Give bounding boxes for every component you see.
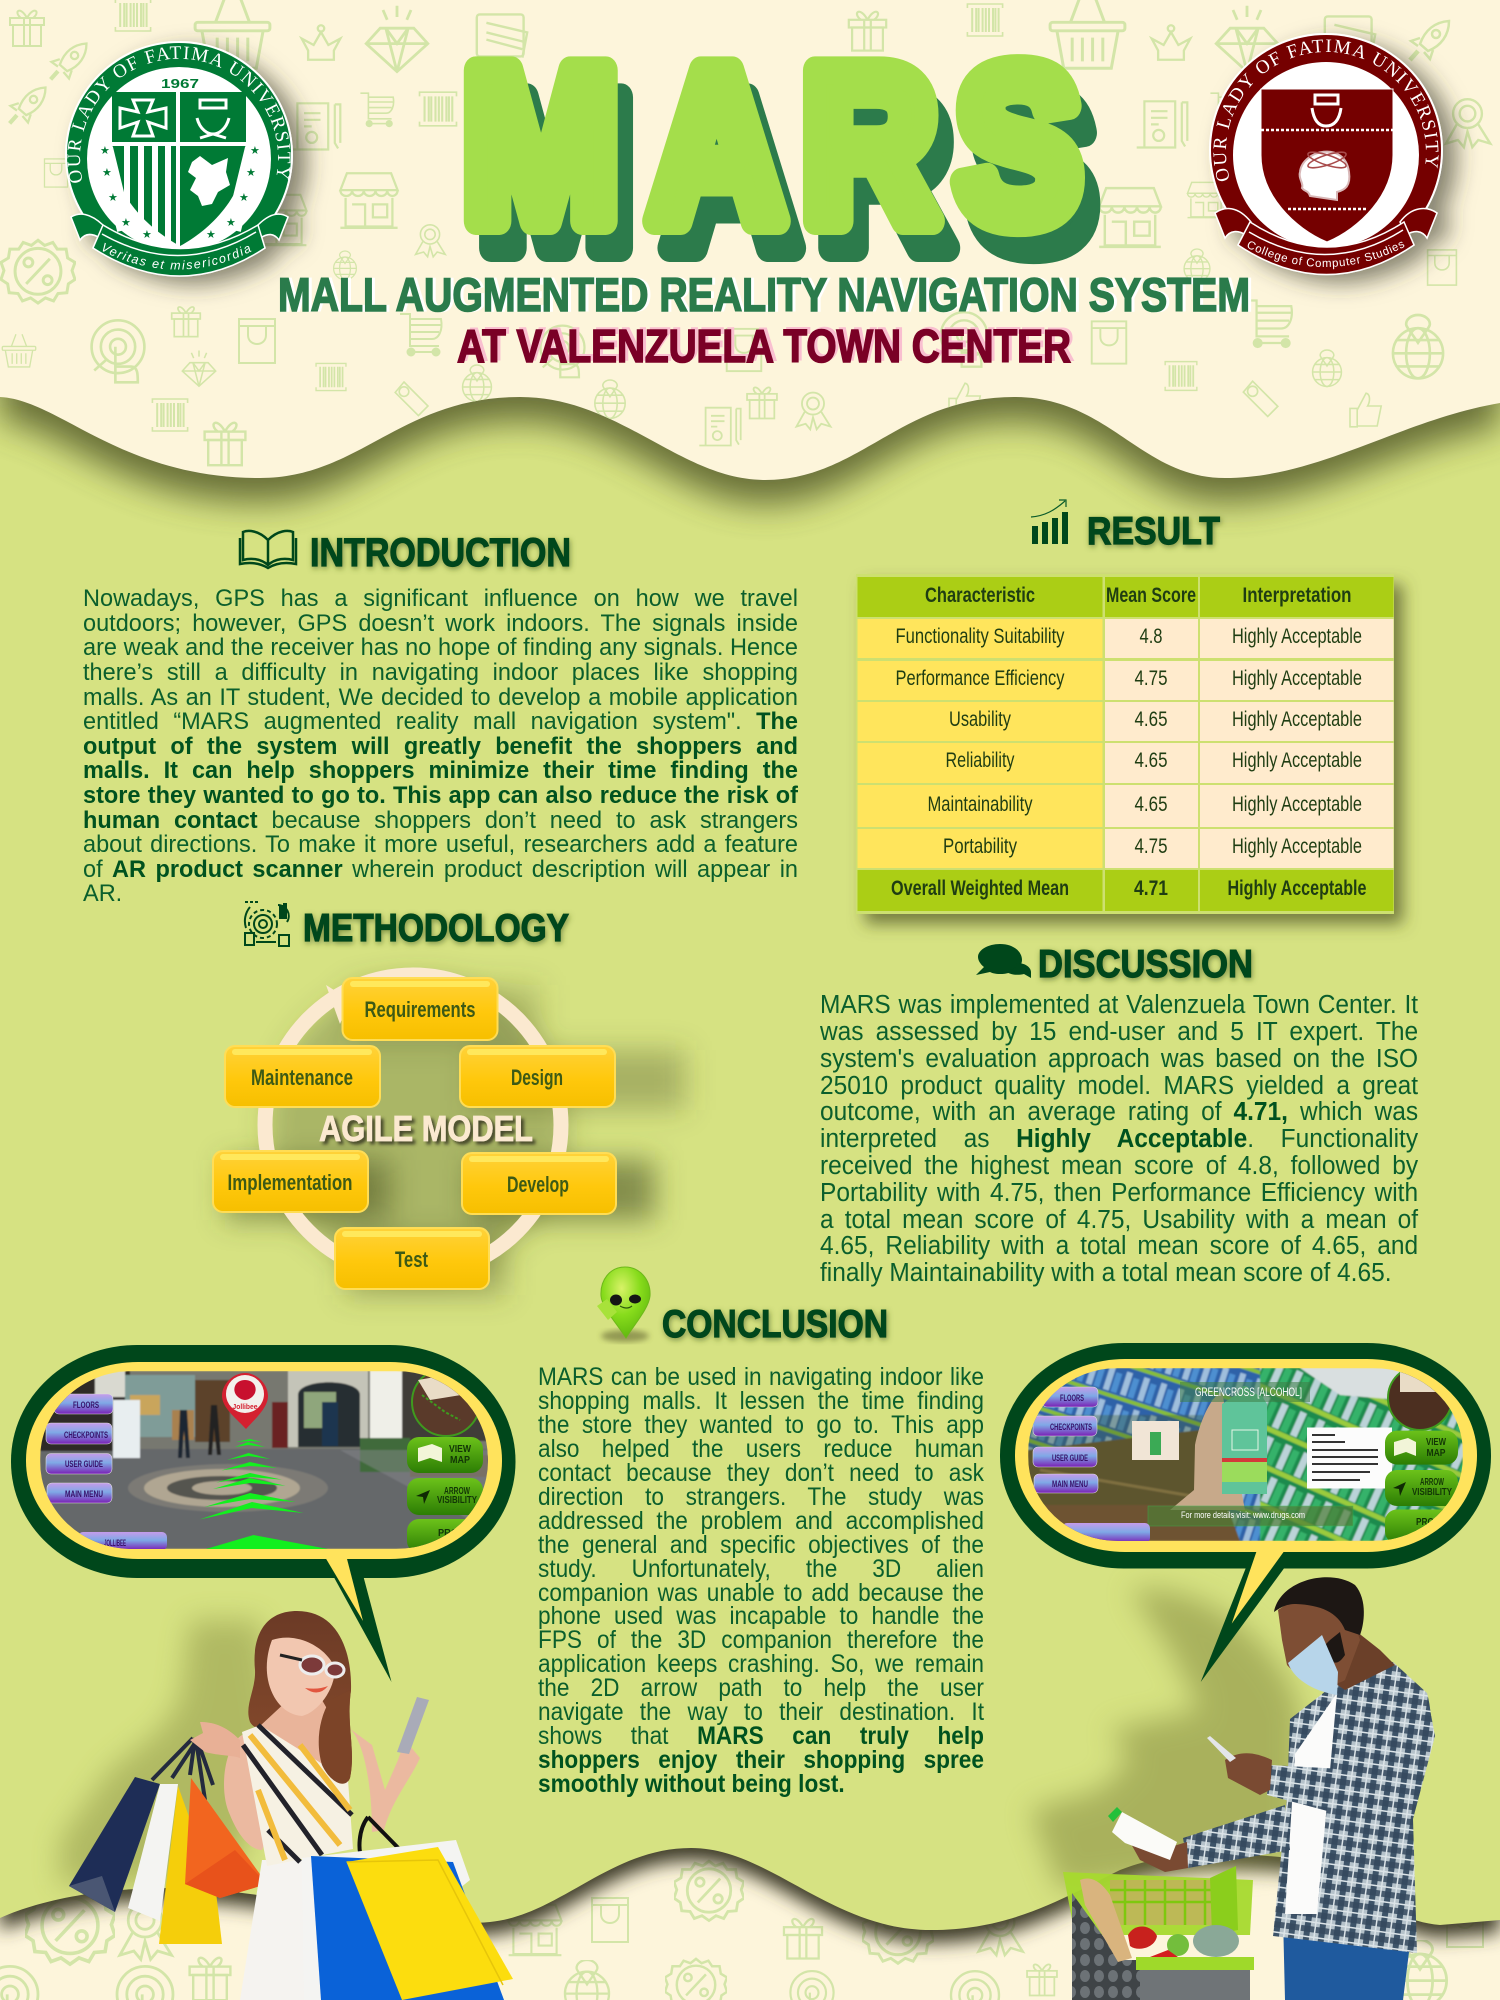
table: evaluation results: Highly Acceptable	[1232, 708, 1362, 731]
subtitle: system name: MALL AUGMENTED REALITY NAVIGATION SYSTEM	[278, 268, 1250, 321]
table: evaluation results: Highly Acceptable	[1232, 625, 1362, 648]
phone hand	[1225, 1753, 1272, 1795]
heading: introduction: INTRODUCTION	[310, 531, 571, 575]
text block: conclusion: MARS can be used in navigating indoor like	[538, 1363, 984, 1391]
icon: alien location pin	[597, 1267, 650, 1342]
text block: conclusion: also helped the users reduce human	[538, 1435, 984, 1463]
box: maintenance	[225, 1046, 380, 1107]
text block: conclusion: the store they wanted to go to. This app	[538, 1411, 984, 1439]
text block: conclusion: shopping malls. It lessen the time finding	[538, 1387, 984, 1415]
background pattern: header icons	[1, 0, 1490, 465]
box: requirements	[342, 978, 498, 1040]
text block: discussion: system's evaluation approach was based on the ISO	[820, 1045, 1418, 1073]
screenshot: mall interior with AR arrows: JOLLIBEE	[104, 1538, 126, 1548]
text block: discussion: a total mean score of 4.75, Usability with a mean of	[820, 1206, 1418, 1234]
screenshot: pharmacy shelf with AR product info: VISIBILITY	[1412, 1487, 1452, 1498]
text block: conclusion: phone used was incapable to handle the	[538, 1602, 984, 1630]
table: evaluation results: Functionality Suitability	[896, 625, 1065, 648]
outstretched arm	[1183, 1805, 1290, 1868]
table: evaluation results: 4.71	[1134, 877, 1168, 900]
title: MARS: MARS	[463, 24, 1080, 268]
text block: conclusion: application keeps crashing. So, we remain	[538, 1650, 984, 1678]
phone	[397, 1697, 429, 1754]
icon: process gears	[245, 902, 289, 946]
table: evaluation results: Highly Acceptable	[1232, 667, 1362, 690]
text block: conclusion: the general and specific objectives of the	[538, 1531, 984, 1559]
seal: Our Lady of Fatima University: Veritas et misericordia	[102, 242, 252, 270]
icon: open book	[240, 531, 296, 568]
table: evaluation results: Mean Score	[1106, 584, 1196, 607]
screenshot: pharmacy shelf with AR product info: ARROW	[1420, 1477, 1444, 1488]
text block: introduction: output of the system will greatly benefit the shoppers and	[83, 733, 798, 760]
heading: result: RESULT	[1087, 510, 1220, 553]
neck	[260, 1700, 348, 1780]
screenshot: pharmacy shelf with AR product info: MAP	[1426, 1448, 1446, 1459]
table: evaluation results: Highly Acceptable	[1232, 749, 1362, 772]
text block: introduction: entitled “MARS augmented reality mall navigation system". The	[83, 708, 798, 735]
text block: conclusion: addressed the problem and accomplished	[538, 1507, 984, 1535]
seal: Our Lady of Fatima University: ★	[250, 145, 260, 157]
screenshot: pharmacy shelf with AR product info: PRO	[1416, 1517, 1434, 1528]
table: evaluation results: 4.8	[1140, 625, 1162, 648]
milk bottle	[1112, 1812, 1177, 1860]
icon: chat bubbles	[976, 944, 1031, 978]
screenshot: mall interior with AR arrows: USER GUIDE	[65, 1459, 103, 1469]
text block: discussion: outcome, with an average rating of 4.71, which was	[820, 1098, 1418, 1126]
background pattern: bottom icons	[0, 1861, 1483, 2000]
text block: discussion: 4.65, Reliability with a total mean score of 4.65, and	[820, 1232, 1418, 1260]
hair	[1274, 1577, 1364, 1635]
text block: conclusion	[538, 1363, 984, 1798]
seal: College of Computer Studies: OUR LADY OF FATIMA UNIVERSITY	[1213, 40, 1439, 182]
table: evaluation results: Interpretation	[1242, 584, 1352, 607]
screenshot: mall interior with AR arrows: VIEW	[449, 1444, 471, 1455]
left shopping bags	[69, 1738, 267, 1944]
screenshot: pharmacy shelf with AR product info	[1028, 1366, 1463, 1544]
screenshot: mall interior with AR arrows	[40, 1368, 490, 1553]
top wave shadow	[0, 24, 1500, 504]
seal: Our Lady of Fatima University: ★	[102, 167, 112, 179]
text block: discussion: Portability with 4.75, then Performance Efficiency with	[820, 1179, 1418, 1207]
screenshot: pharmacy shelf with AR product info: USER GUIDE	[1052, 1453, 1088, 1463]
box: maintenance: Maintenance	[251, 1065, 353, 1090]
icon: bar chart	[1031, 500, 1068, 544]
table: evaluation results: Performance Efficiency	[896, 667, 1065, 690]
table: evaluation results: Usability	[949, 708, 1011, 731]
seal: Our Lady of Fatima University: ★	[108, 192, 118, 204]
table: evaluation results: 4.75	[1134, 667, 1168, 690]
screenshot: pharmacy shelf with AR product info: CHECKPOINTS	[1050, 1422, 1092, 1432]
face	[267, 1638, 335, 1716]
seal: Our Lady of Fatima University: ★	[239, 192, 249, 204]
screenshot: mall interior with AR arrows: MAP	[450, 1455, 470, 1466]
box: test: Test	[395, 1247, 429, 1272]
box: design: Design	[511, 1065, 563, 1090]
striped top	[242, 1725, 353, 1866]
text block: introduction: Nowadays, GPS has a significant influence on how we travel	[83, 585, 798, 612]
subtitle: system name: MALL AUGMENTED REALITY NAVIGATION SYSTEM	[281, 268, 1253, 321]
table: evaluation results: Highly Acceptable	[1228, 877, 1366, 900]
text block: discussion: 25010 product quality model. MARS yielded a great	[820, 1072, 1418, 1100]
table: evaluation results: Portability	[943, 835, 1017, 858]
top cream header with wave edge	[0, 0, 1500, 480]
seal: Our Lady of Fatima University: ★	[246, 167, 256, 179]
table: evaluation results: 4.65	[1134, 749, 1168, 772]
label: agile model: AGILE MODEL	[319, 1108, 533, 1149]
table: evaluation results	[856, 574, 1394, 914]
text block: introduction: malls. As an IT student, We decided to develop a mobile application	[83, 684, 798, 711]
shopping cart	[1063, 1866, 1254, 2000]
man shopper with cart	[1063, 1577, 1435, 2000]
text block: conclusion: navigate the way to their destination. It	[538, 1698, 984, 1726]
text block: conclusion: contact because they don’t need to ask	[538, 1459, 984, 1487]
face mask	[1288, 1635, 1338, 1695]
box: develop: Develop	[507, 1172, 569, 1197]
subtitle: location: AT VALENZUELA TOWN CENTER	[460, 318, 1074, 370]
subtitle: location: AT VALENZUELA TOWN CENTER	[457, 320, 1071, 372]
seal: Our Lady of Fatima University: 1967	[161, 76, 199, 91]
arms	[224, 1735, 270, 1850]
text block: introduction: there’s still a difficulty in navigating indoor places like shopping	[83, 659, 798, 686]
text block: introduction: outdoors; however, GPS doesn’t work indoors. The signals inside	[83, 610, 798, 637]
table: evaluation results: Overall Weighted Mean	[891, 877, 1069, 900]
text block: introduction: of AR product scanner wherein product description will appear in	[83, 856, 798, 883]
jeans	[1283, 1916, 1410, 2000]
hair falling over shoulder	[319, 1690, 352, 1784]
box: requirements: Requirements	[364, 997, 476, 1022]
text block: conclusion: FPS of the 3D companion therefore the	[538, 1626, 984, 1654]
white trousers	[240, 1860, 320, 2000]
title: MARS: MARS	[479, 51, 1096, 295]
screenshot: mall interior with AR arrows: Jollibee	[232, 1404, 258, 1411]
screenshot: pharmacy shelf with AR product info: MAIN MENU	[1052, 1479, 1088, 1489]
text block: conclusion: shoppers enjoy their shopping spree	[538, 1746, 984, 1774]
heading: methodology: METHODOLOGY	[303, 907, 569, 950]
text block: conclusion: direction to strangers. The study was	[538, 1483, 984, 1511]
seal: Our Lady of Fatima University: ★	[206, 229, 216, 241]
hair back	[248, 1611, 352, 1784]
seal: Our Lady of Fatima University: ★	[142, 229, 152, 241]
text block: discussion: interpreted as Highly Acceptable. Functionality	[820, 1125, 1418, 1153]
text block: introduction: human contact because shoppers don’t need to ask strangers	[83, 807, 798, 834]
white tee	[1285, 1693, 1337, 1914]
screenshot: mall interior with AR arrows: FLOORS	[73, 1400, 99, 1410]
table: evaluation results: Highly Acceptable	[1232, 793, 1362, 816]
seal: Our Lady of Fatima University: ★	[226, 217, 236, 229]
table: evaluation results: 4.75	[1134, 835, 1168, 858]
text block: discussion: finally Maintainability with a total mean score of 4.65.	[820, 1259, 1392, 1287]
plaid shirt	[1273, 1662, 1435, 1953]
seal: Our Lady of Fatima University: ★	[100, 145, 110, 157]
text block: conclusion: shows that MARS can truly help	[538, 1722, 984, 1750]
table: evaluation results: 4.65	[1134, 793, 1168, 816]
heading: discussion: DISCUSSION	[1038, 943, 1253, 986]
speech bubble: product scanner screenshot	[1000, 1343, 1491, 1682]
box: implementation	[213, 1151, 368, 1212]
neck and head	[1330, 1620, 1395, 1690]
sunglasses	[300, 1656, 344, 1677]
text block: introduction: store they wanted to go to. This app can also reduce the risk of	[83, 782, 798, 809]
text block: introduction	[83, 585, 798, 907]
screenshot: mall interior with AR arrows: MAIN MENU	[65, 1489, 103, 1499]
seal: Our Lady of Fatima University	[63, 33, 323, 301]
text block: discussion: received the highest mean score of 4.8, followed by	[820, 1152, 1418, 1180]
table: evaluation results: Characteristic	[925, 584, 1035, 607]
seal: College of Computer Studies: College of Computer Studies	[1248, 241, 1404, 270]
screenshot: pharmacy shelf with AR product info: VIEW	[1426, 1437, 1446, 1448]
screenshot: mall interior with AR arrows: PRO	[438, 1528, 458, 1539]
text block: discussion: MARS was implemented at Valenzuela Town Center. It	[820, 991, 1418, 1019]
text block: introduction: malls. It can help shoppers minimize their time finding the	[83, 757, 798, 784]
man cast shadow	[1030, 1589, 1300, 1890]
table: evaluation results: 4.65	[1134, 708, 1168, 731]
text block: introduction: AR.	[83, 880, 122, 907]
woman cast shadow	[60, 1620, 280, 1885]
table: evaluation results: Reliability	[946, 749, 1015, 772]
screenshot: pharmacy shelf with AR product info: For more details visit: www.drugs.com	[1181, 1510, 1305, 1520]
speech bubble: mall navigation screenshot	[11, 1345, 516, 1682]
text block: discussion: was assessed by 15 end-user and 5 IT expert. The	[820, 1018, 1418, 1046]
raised sleeve	[1267, 1693, 1431, 1825]
text block: conclusion: study. Unfortunately, the 3D alien	[538, 1555, 984, 1583]
screenshot: mall interior with AR arrows: ARROW	[444, 1486, 470, 1497]
box: design	[460, 1046, 615, 1107]
woman shopper with bags	[69, 1611, 513, 2000]
table: evaluation results: Maintainability	[928, 793, 1033, 816]
screenshot: pharmacy shelf with AR product info: FLOORS	[1060, 1393, 1084, 1403]
text block: introduction: are weak and the receiver has no hope of finding any signals. Hence	[83, 634, 798, 661]
diagram: agile model cycle	[213, 974, 685, 1295]
text block: conclusion: smoothly without being lost.	[538, 1770, 845, 1798]
right shopping bags	[302, 1817, 513, 2000]
table: evaluation results: Highly Acceptable	[1232, 835, 1362, 858]
box: develop	[462, 1153, 616, 1214]
screenshot: mall interior with AR arrows: VISIBILITY	[437, 1495, 477, 1506]
text block: conclusion: companion was unable to add because the	[538, 1579, 984, 1607]
screenshot: mall interior with AR arrows: CHECKPOINTS	[64, 1430, 108, 1440]
heading: conclusion: CONCLUSION	[662, 1303, 888, 1346]
seal: Our Lady of Fatima University: ★	[121, 217, 131, 229]
box: test	[335, 1228, 489, 1289]
box: implementation: Implementation	[228, 1170, 352, 1195]
screenshot: pharmacy shelf with AR product info: GREENCROSS [ALCOHOL]	[1195, 1385, 1302, 1399]
text block: conclusion: the 2D arrow path to help the user	[538, 1674, 984, 1702]
text block: discussion	[820, 991, 1418, 1287]
seal: Our Lady of Fatima University: OUR LADY OF FATIMA UNIVERSITY	[68, 46, 290, 183]
seal: College of Computer Studies	[1207, 25, 1473, 300]
text block: introduction: about directions. To make it more useful, researchers add a feature	[83, 831, 798, 858]
